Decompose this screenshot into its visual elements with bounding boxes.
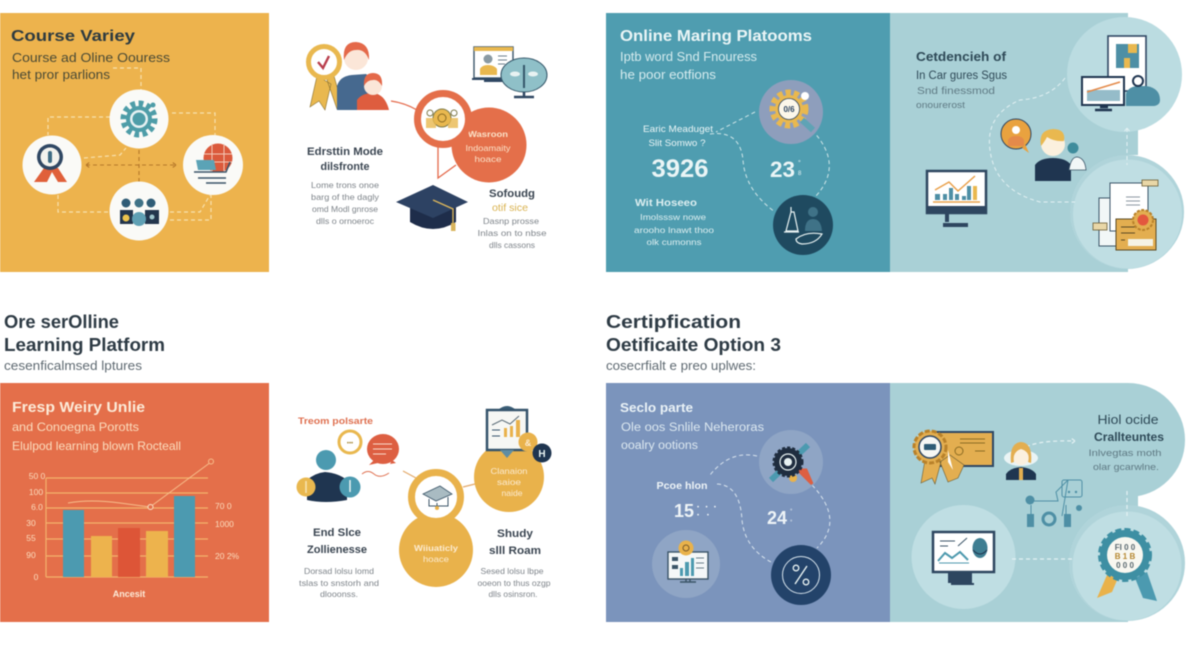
text block: selection subtitle	[621, 422, 764, 452]
icon: team person	[296, 450, 360, 502]
heading: one-stop online learning platform: Ore serOlline	[4, 312, 119, 332]
icon: globe and laptop	[183, 135, 243, 195]
bar chart: 70 0	[215, 501, 232, 511]
icon: percent circle	[771, 545, 831, 605]
text block: safety note: Inlas on to nbse	[478, 228, 547, 238]
icon: dashboard monitor	[652, 530, 720, 598]
icon: presenter	[1004, 442, 1038, 480]
icon: rosette badge: B 1 B	[1115, 552, 1135, 561]
icon: graduation cap	[396, 185, 468, 231]
heading: one-stop online learning platform: cesenficalmsed lptures	[4, 358, 143, 373]
heading: certification option 3: Certipfication	[606, 312, 741, 332]
icon: dark support circle	[773, 195, 833, 255]
heading: selection: Seclo parte	[620, 400, 693, 415]
text block: high order: olar gcarwlne.	[1093, 462, 1159, 473]
text block: education mode: Lome trons onoe	[311, 180, 379, 190]
text block: wit hoseeo: arooho lnawt thoo	[634, 225, 714, 235]
text block: study room: slll Roam	[489, 545, 541, 557]
text block: selection subtitle: Ole oos Snlile Neheroras	[621, 422, 764, 434]
callout: yellow bubble upper: saioe	[497, 477, 521, 487]
heading: one-stop online learning platform: Learning Platform	[4, 335, 165, 355]
text block: safety note: Sofoudg	[489, 188, 535, 200]
icon: award ribbon	[22, 136, 82, 194]
heading: chart panel: Fresp Weiry Unlie	[12, 399, 145, 416]
arrow: horizontal dashed link	[86, 150, 176, 182]
icon: speech bubble	[362, 434, 399, 476]
stat: 15: Pcoe hlon	[656, 481, 708, 492]
text block: education mode	[307, 146, 383, 226]
stat: 15: • •	[697, 513, 709, 519]
icon: trend monitor	[926, 171, 986, 225]
icon: learners group	[110, 182, 168, 240]
heading: certification option 3: Oetificaite Option 3	[606, 335, 781, 355]
text block: credentials: Snd finessmod	[917, 85, 995, 97]
stat: 3926	[643, 124, 713, 183]
stat: 24: °	[790, 520, 793, 526]
stat: 23: 23	[770, 157, 795, 182]
stat: 3926: Slit Somwo ?	[648, 138, 706, 149]
text block: end slice: Zollienesse	[307, 544, 367, 556]
dashed connectors	[710, 112, 829, 212]
text block: end slice	[299, 527, 379, 599]
text block: safety note: Dasnp prosse	[483, 216, 539, 226]
icon: yellow ring with cap	[412, 472, 460, 522]
callout: orange bubble: Wasroon	[468, 129, 508, 139]
panel: team and study	[296, 406, 552, 599]
callout: yellow bubble lower: Wiiuaticly	[414, 543, 458, 553]
text block: study room: Shudy	[497, 528, 534, 540]
bar chart: 90	[26, 550, 36, 560]
bar chart: 30	[26, 518, 36, 528]
icon: presentation board: H	[538, 449, 546, 460]
text block: end slice: dlooonss.	[320, 589, 358, 599]
callout: orange bubble: Indoamaity	[466, 143, 511, 153]
text block: course subtitle: Course ad Oline Oouress	[12, 51, 170, 65]
stat: 3926: 3926	[652, 155, 708, 183]
bar chart: 20 2%	[215, 551, 240, 561]
stat: 15: 15	[674, 501, 694, 521]
panel: education mode	[307, 42, 547, 250]
text block: study room: dlls osinsron.	[488, 589, 538, 599]
icon: medal	[308, 46, 343, 110]
text block: education mode: barg of the dagly	[311, 192, 380, 202]
text block: credentials: In Car gures Sgus	[916, 70, 1007, 82]
panel: online learning platforms	[606, 13, 890, 272]
heading: platforms: Online Maring Platooms	[620, 28, 812, 45]
text block: wit hoseeo: olk cumonns	[646, 237, 702, 247]
icon: monitor with chart	[933, 532, 994, 584]
text block: course subtitle	[12, 51, 170, 82]
text block: course subtitle: het pror parlions	[12, 68, 110, 82]
text block: safety note	[478, 188, 547, 250]
text block: high order: Hiol ocide	[1098, 413, 1159, 427]
stat: 3926: Earic Meaduget	[643, 124, 713, 135]
text block: platforms subtitle	[620, 50, 757, 82]
icon: presentation board	[487, 406, 552, 462]
panel: credentials	[890, 13, 1184, 272]
icon: gear magnifier	[759, 80, 823, 144]
bar chart: 50 0	[29, 471, 46, 481]
text block: wit hoseeo: Wit Hoseeo	[635, 197, 697, 209]
stat: 15	[656, 481, 716, 521]
dashed connectors	[710, 455, 830, 564]
icon: laptop presenter	[472, 47, 514, 81]
dashed arrows	[1012, 438, 1127, 559]
bar chart: 0	[34, 572, 39, 582]
text block: platforms subtitle: Iptb word Snd Fnouress	[620, 50, 757, 64]
bar chart: Ancesit	[113, 589, 145, 599]
icon: document and dashboard	[1082, 36, 1160, 110]
text block: education mode: dilsfronte	[320, 161, 370, 173]
dashed connectors	[989, 78, 1130, 202]
icon: parent and child	[337, 42, 389, 110]
text block: study room	[478, 528, 551, 599]
stat: 23: °	[798, 159, 801, 167]
stat: 23: 8	[798, 171, 802, 177]
icon: orange ring badge	[418, 94, 468, 144]
text block: platforms subtitle: he poor eotfions	[620, 68, 716, 82]
icon: certificate with rosette	[914, 431, 993, 484]
text block: chart subtitle	[12, 420, 181, 453]
icon: rosette badge	[1097, 530, 1157, 601]
icon: rosette badge: 0 0 0	[1116, 561, 1134, 570]
panel: selection stats	[606, 383, 890, 622]
bar chart: 1000	[215, 519, 234, 529]
bar chart: 6.0	[31, 502, 43, 512]
text block: end slice: Dorsad lolsu lomd	[304, 566, 374, 576]
text block: safety note: otif sice	[492, 203, 528, 214]
bar chart: 55	[26, 533, 36, 543]
text block: high order: Inlvegtas moth	[1088, 448, 1162, 459]
callout: orange bubble	[452, 108, 526, 182]
heading: one-stop online learning platform	[4, 312, 165, 373]
text block: chart subtitle: Elulpod learning blown Rocteall	[12, 439, 181, 453]
callout: yellow bubble upper	[474, 442, 544, 512]
text block: study room: Sesed lolsu lbpe	[480, 566, 544, 576]
text block: high order: Crallteuntes	[1094, 432, 1164, 444]
text block: credentials: Cetdencieh of	[916, 49, 1007, 64]
icon: gear magnifier: 0/6	[783, 105, 795, 114]
icon: avatar bubble	[1001, 119, 1031, 153]
text block: wit hoseeo	[634, 197, 714, 247]
text block: safety note: dlls cassons	[489, 240, 535, 250]
text block: end slice: tslas to snstorh and	[299, 578, 379, 588]
callout: yellow bubble upper: naide	[502, 488, 523, 498]
text block: education mode: omd Modl gnrose	[312, 204, 378, 214]
icon: documents and gear	[1093, 180, 1158, 250]
text block: end slice: End Slce	[313, 527, 361, 539]
text block: selection subtitle: ooalry ootions	[621, 440, 698, 452]
stat: 24: °	[790, 509, 793, 515]
text: team label: Treom polsarte	[298, 416, 373, 427]
panel: high order credentials	[890, 383, 1185, 622]
icon: gear	[110, 90, 168, 148]
connectors	[391, 101, 456, 178]
bar chart	[26, 459, 240, 599]
bar chart: 100	[29, 487, 43, 497]
connectors	[403, 471, 475, 487]
stat: 24: 24	[767, 508, 787, 528]
text block: study room: ooeon to thus ozgp	[478, 578, 551, 588]
text block: education mode: dlls o ornoeroc	[316, 216, 375, 226]
text block: credentials	[916, 49, 1007, 111]
icon: presentation board: &	[525, 438, 532, 448]
panel: bar chart	[0, 383, 269, 622]
dashed connectors	[48, 68, 215, 220]
text block: chart subtitle: and Conoegna Porotts	[12, 420, 139, 434]
callout: orange bubble: hoace	[474, 154, 502, 164]
icon: chat monitor	[501, 58, 547, 97]
heading: certification option 3	[606, 312, 781, 373]
text block: wit hoseeo: Imolsssw nowe	[640, 212, 706, 222]
heading: certification option 3: cosecrfialt e preo uplwes:	[606, 358, 756, 373]
icon: small coin bubble	[339, 431, 361, 453]
text block: credentials: onourerost	[916, 100, 965, 111]
icon: network diagram	[1026, 480, 1082, 527]
icon: rosette badge: FI 0 0	[1115, 543, 1136, 552]
text block: education mode: Edrsttin Mode	[307, 146, 383, 158]
callout: yellow bubble lower	[399, 513, 473, 587]
callout: yellow bubble lower: hoace	[423, 554, 449, 564]
icon: gear and tools	[759, 430, 823, 494]
icon: student	[1035, 129, 1086, 181]
heading: course variety: Course Variey	[11, 28, 135, 45]
icon: small coin bubble: •••	[347, 441, 353, 447]
text block: high order	[1088, 413, 1164, 473]
stat: 15: • • •	[697, 505, 716, 511]
panel: course variety	[0, 13, 269, 272]
callout: yellow bubble upper: Clanaion	[490, 466, 528, 476]
